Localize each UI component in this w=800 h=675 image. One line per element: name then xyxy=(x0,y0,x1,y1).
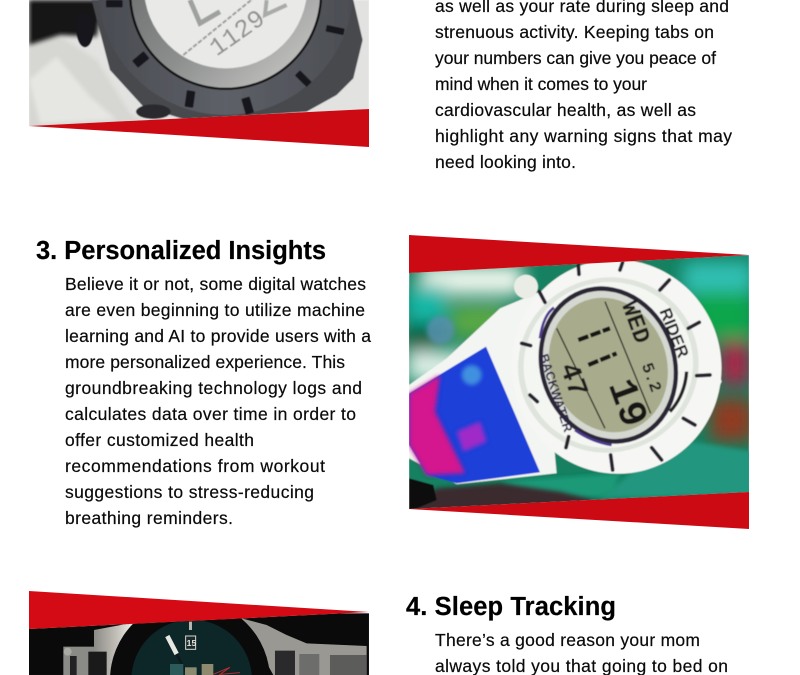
text block: heart rate paragraph continued: strenuous activity. Keeping tabs on xyxy=(435,22,714,42)
text block: personalized insights paragraph: more personalized experience. This xyxy=(65,352,345,372)
icon: watch case xyxy=(76,0,363,120)
watch display and bezel lettering: 19 xyxy=(596,373,655,434)
watch display reading: 1129 xyxy=(205,5,271,63)
text block: personalized insights paragraph: Believe it or not, some digital watches xyxy=(65,274,366,294)
text block: personalized insights paragraph: offer customized health xyxy=(65,430,254,450)
heading: 3. Personalized Insights: 3. Personalized Insights xyxy=(36,237,326,265)
text block: sleep tracking paragraph xyxy=(435,630,728,675)
watch display and bezel lettering: 5.2 xyxy=(636,361,664,395)
text block: personalized insights paragraph xyxy=(65,274,371,528)
text block: personalized insights paragraph: recommendations from workout xyxy=(65,456,325,476)
heading: 4. Sleep Tracking: 4. Sleep Tracking xyxy=(406,593,616,621)
panel: photo of dark steel watch xyxy=(29,591,369,675)
strap xyxy=(409,292,557,484)
text block: heart rate paragraph continued: mind when it comes to your xyxy=(435,74,647,94)
text block: heart rate paragraph continued: cardiovascular health, as well as xyxy=(435,100,696,120)
icon: watch dial xyxy=(110,618,269,675)
text block: heart rate paragraph continued xyxy=(435,0,732,172)
watch display and bezel lettering: WED xyxy=(614,298,654,348)
text block: personalized insights paragraph: learning and AI to provide users with a xyxy=(65,326,371,346)
icon: watch case xyxy=(514,261,722,475)
red wedge below photo xyxy=(409,492,749,529)
red wedge under photo xyxy=(29,109,369,147)
text block: heart rate paragraph continued: your numbers can give you peace of xyxy=(435,48,716,68)
text block: personalized insights paragraph: are even beginning to utilize machine xyxy=(65,300,365,320)
text block: heart rate paragraph continued: need looking into. xyxy=(435,152,576,172)
red wedge above photo xyxy=(29,591,369,629)
text block: personalized insights paragraph: suggestions to stress-reducing xyxy=(65,482,314,502)
bracelet and lugs xyxy=(63,618,367,675)
text block: personalized insights paragraph: breathing reminders. xyxy=(65,508,233,528)
watch display and bezel lettering: 47 xyxy=(552,358,594,402)
red wedge above photo xyxy=(409,235,749,273)
text block: heart rate paragraph continued: highlight any warning signs that may xyxy=(435,126,732,146)
text block: sleep tracking paragraph: There’s a good reason your mom xyxy=(435,630,700,650)
watch display and bezel lettering: BACKWATER xyxy=(536,352,575,434)
text block: personalized insights paragraph: calculates data over time in order to xyxy=(65,404,356,424)
panel: photo of grey digital watch on snow xyxy=(29,0,369,147)
watch display and bezel lettering xyxy=(536,298,693,434)
text block: personalized insights paragraph: groundbreaking technology logs and xyxy=(65,378,362,398)
panel: photo of white watch with galaxy strap xyxy=(407,235,753,529)
watch display and bezel lettering: RIDER xyxy=(656,305,693,361)
date window numeral: 15 xyxy=(187,638,196,648)
